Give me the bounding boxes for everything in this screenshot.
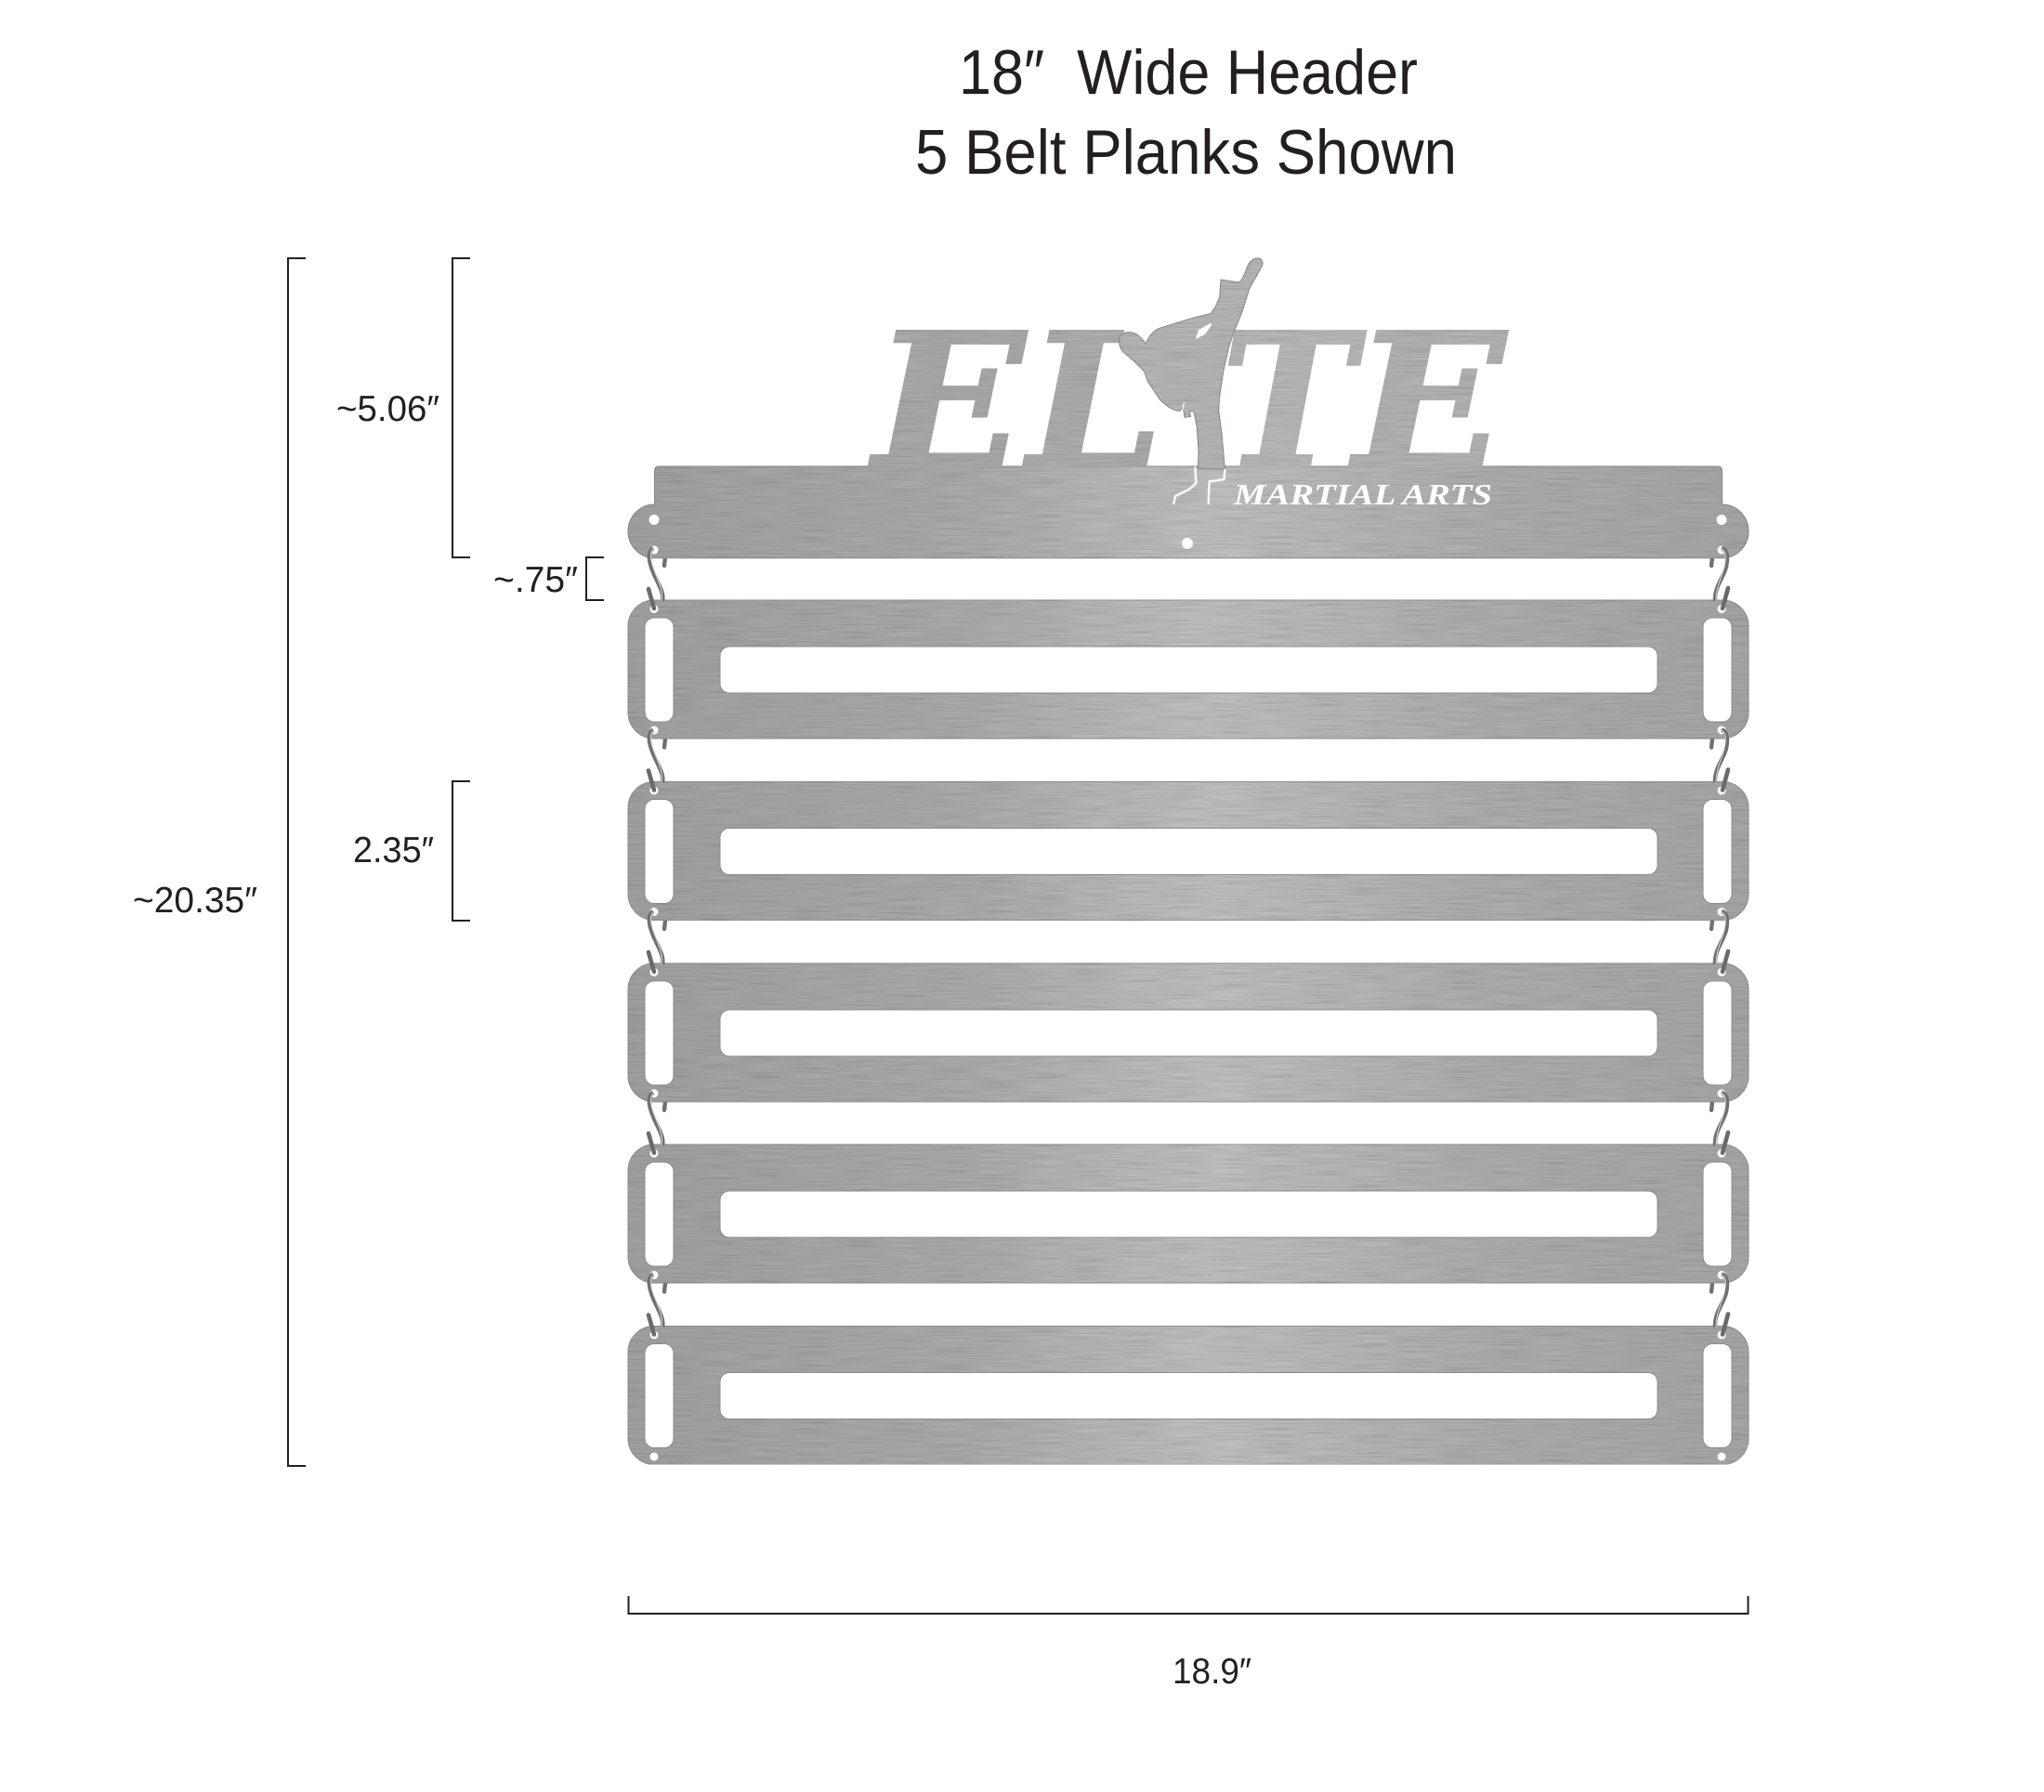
title: 18″ Wide Header [959,37,1418,108]
plank 2 [628,782,1749,920]
dimension: plank height: 2.35″ [353,831,434,870]
plank 4 [628,1145,1749,1283]
plank 3 [628,963,1749,1102]
cut-out details on header [649,323,1726,1461]
s-hooks over plates [649,548,1728,1334]
header plate [628,258,1749,558]
word ELITE: I [1198,391,1208,413]
dimension: overall width: 18.9″ [1173,1652,1251,1692]
word ELITE [869,293,1508,511]
kicking figure [1120,258,1263,469]
plank 5 [628,1327,1749,1464]
plank 1 [628,600,1749,739]
word ELITE: E [869,293,1028,510]
dimension: overall width [628,1596,1749,1692]
s-hook tails behind plates [664,557,1712,1291]
link holes on plates [650,546,1726,1340]
dimension: plank height [353,781,470,921]
dimension: gap between planks: ~.75″ [493,560,578,600]
dimension: overall height: ~20.35″ [133,881,257,921]
metal plates [628,258,1749,1464]
dimension: header height [336,258,470,557]
word ELITE: E [1349,293,1508,510]
martial arts text: MARTIAL ARTS [1233,477,1492,511]
word ELITE: T [1221,293,1367,511]
mounting holes [649,515,1726,1460]
word ELITE: L [1023,293,1163,511]
dimension: overall height [133,258,306,1466]
title [915,37,1457,188]
dimension: header height: ~5.06″ [336,389,439,429]
figure cut lines [1173,323,1225,504]
header bar [628,466,1749,558]
title: 5 Belt Planks Shown [915,117,1457,188]
